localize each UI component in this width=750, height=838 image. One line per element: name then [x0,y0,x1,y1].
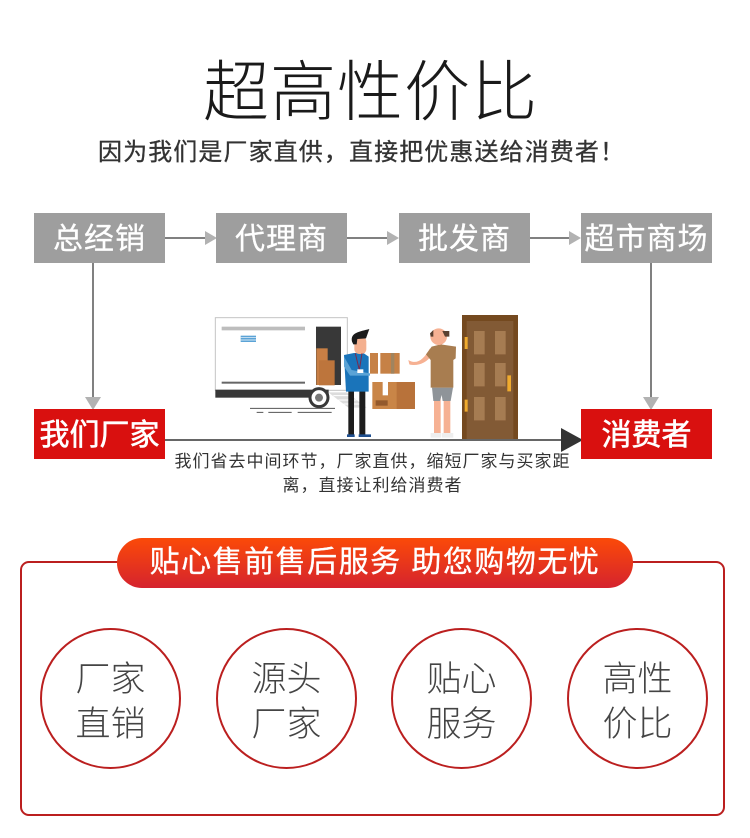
panel: services [20,561,725,816]
box: 消费者 [581,409,712,459]
box: 消费者: 消费者 [602,419,692,452]
box: 总经销 [34,213,165,263]
truck [215,318,367,412]
circle: 高性价比 [567,628,708,769]
circle: 高性价比: 价比 [602,705,672,744]
title: 超高性价比 [203,55,538,129]
circle: 高性价比: 高性 [602,660,672,699]
circle: 贴心服务: 贴心 [426,660,496,699]
banner heading [117,538,633,588]
box: 代理商: 代理商 [235,223,328,256]
circle: 贴心服务 [391,628,532,769]
flow arrows [85,231,659,410]
box: 代理商 [216,213,347,263]
circle: 源头厂家: 源头 [251,660,322,699]
banner heading: 贴心售前售后服务 助您购物无忧 [150,546,600,579]
direct line arrow [165,428,583,452]
box: 批发商: 批发商 [418,223,511,256]
circle: 厂家直销 [40,628,181,769]
flow caption: 我们省去中间环节，厂家直供，缩短厂家与买家距 [174,452,570,471]
box: 超市商场: 超市商场 [584,223,708,256]
circle: 源头厂家 [216,628,357,769]
box: 我们厂家: 我们厂家 [40,419,160,452]
delivery man [344,329,371,437]
flow caption: 离，直接让利给消费者 [282,476,462,495]
subtitle: 因为我们是厂家直供，直接把优惠送给消费者！ [98,139,625,166]
circle: 厂家直销: 厂家 [75,660,146,699]
box: 总经销: 总经销 [53,223,146,256]
held parcel [370,353,400,374]
circle: 贴心服务: 服务 [426,705,496,744]
illustration: delivery scene [215,315,518,439]
circle: 源头厂家: 厂家 [251,705,322,744]
customer [408,328,456,438]
flow caption [174,452,570,495]
box: 我们厂家 [34,409,165,459]
box: 超市商场 [581,213,712,263]
door [462,315,518,439]
box: 批发商 [399,213,530,263]
parcel on floor [372,382,415,409]
circle: 厂家直销: 直销 [75,705,146,744]
